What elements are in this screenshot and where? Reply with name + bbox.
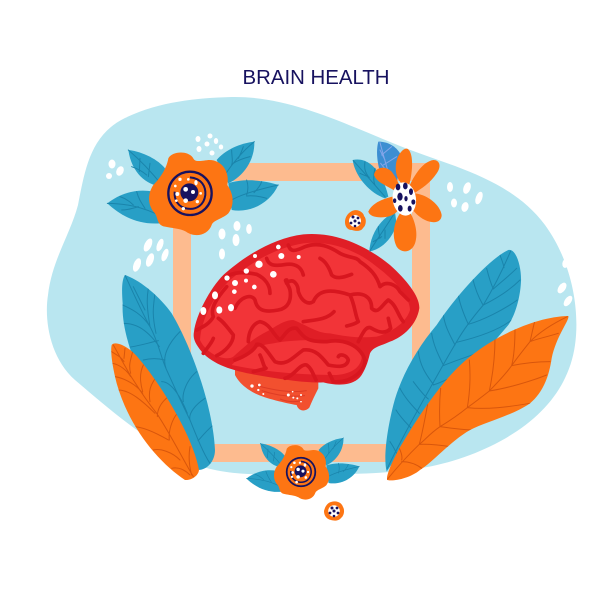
- brain white dots: [200, 245, 301, 315]
- flower leaves: [246, 438, 359, 492]
- flower center: [390, 181, 418, 217]
- brain lighter lower lobe: [232, 340, 362, 375]
- peach square frame: [182, 172, 421, 453]
- background white dots: [106, 134, 574, 308]
- flower head: [149, 153, 233, 235]
- title: BRAIN HEALTH: [242, 67, 390, 89]
- left teal leaf: [122, 275, 215, 470]
- top left flower with leaves: [107, 142, 278, 235]
- flower rings: [287, 458, 315, 486]
- flower head: [274, 445, 329, 500]
- bottom flower with leaves: [246, 438, 359, 500]
- top right flower with leaves: [353, 142, 442, 252]
- small flower below: [324, 501, 344, 521]
- flower rings: [168, 172, 212, 215]
- brain sulci: [197, 245, 408, 382]
- background blob: [47, 97, 576, 474]
- brain: [194, 234, 419, 410]
- flower seeds: [393, 183, 415, 212]
- flower leaves: [107, 142, 278, 224]
- flower dots: [174, 178, 202, 210]
- flower leaves: [353, 142, 402, 252]
- small flower near brain: [345, 210, 366, 231]
- flower petals: [368, 149, 442, 251]
- right teal leaf: [385, 250, 521, 472]
- brain lighter upper lobe: [200, 243, 410, 358]
- brain outer shape: [194, 234, 419, 385]
- flower dots: [290, 461, 309, 483]
- left orange leaf: [111, 343, 199, 480]
- right orange leaf: [387, 316, 568, 480]
- cerebellum: [235, 365, 318, 410]
